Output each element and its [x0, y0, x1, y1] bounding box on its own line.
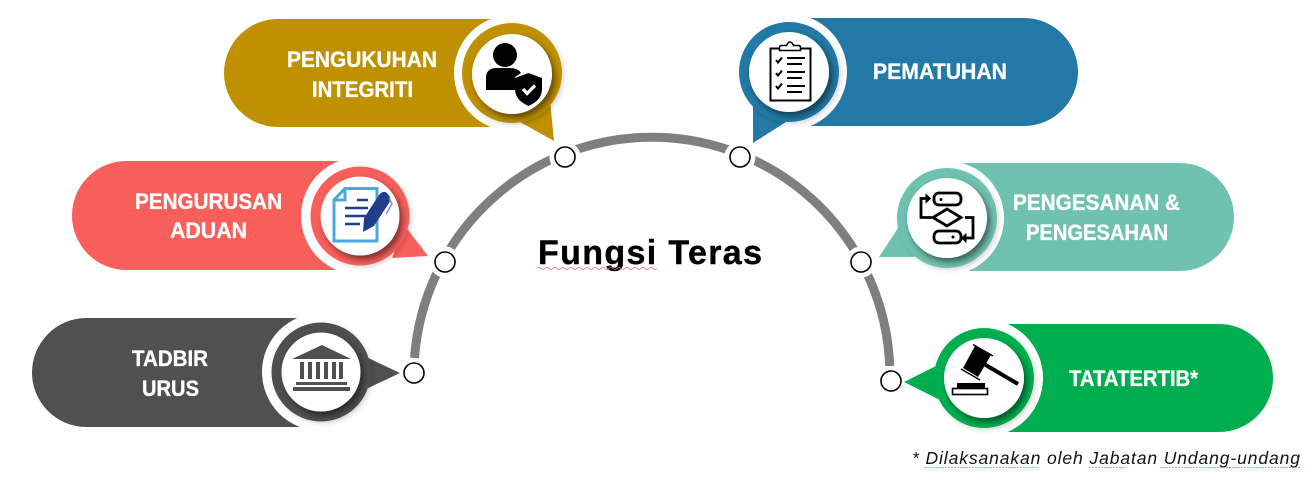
- panel: tadbir urus: [32, 313, 400, 431]
- label: INTEGRITI: [312, 77, 413, 102]
- central arc with nodes: [404, 137, 901, 391]
- label: [132, 346, 208, 401]
- panel: pengesanan dan pengesahan: [879, 161, 1234, 275]
- icon: document and pen: [334, 188, 392, 241]
- label: ADUAN: [170, 218, 247, 243]
- panel: pengurusan aduan: [72, 157, 428, 275]
- icon: person with shield: [486, 43, 542, 106]
- panel: pengukuhan integriti: [224, 15, 570, 141]
- label: PENGESANAN &: [1013, 190, 1180, 215]
- label: TATATERTIB*: [1069, 366, 1198, 391]
- panel: pematuhan: [731, 14, 1078, 143]
- label: TADBIR: [132, 346, 208, 371]
- label: [287, 47, 437, 102]
- label: PENGURUSAN: [135, 189, 282, 214]
- label: PENGUKUHAN: [287, 47, 437, 72]
- label: PENGESAHAN: [1026, 220, 1168, 245]
- icon: government building: [292, 345, 351, 391]
- label: [135, 189, 282, 243]
- footnote: * Dilaksanakan oleh Jabatan Undang-undang: [912, 448, 1300, 468]
- panel: tatatertib: [904, 319, 1273, 437]
- icon: clipboard checklist: [770, 42, 810, 100]
- title: Fungsi Teras: [538, 234, 762, 272]
- label: URUS: [142, 376, 199, 401]
- icon: gavel: [952, 344, 1018, 394]
- label: PEMATUHAN: [873, 59, 1007, 84]
- label: [1013, 190, 1180, 245]
- icon: process flowchart: [921, 193, 973, 243]
